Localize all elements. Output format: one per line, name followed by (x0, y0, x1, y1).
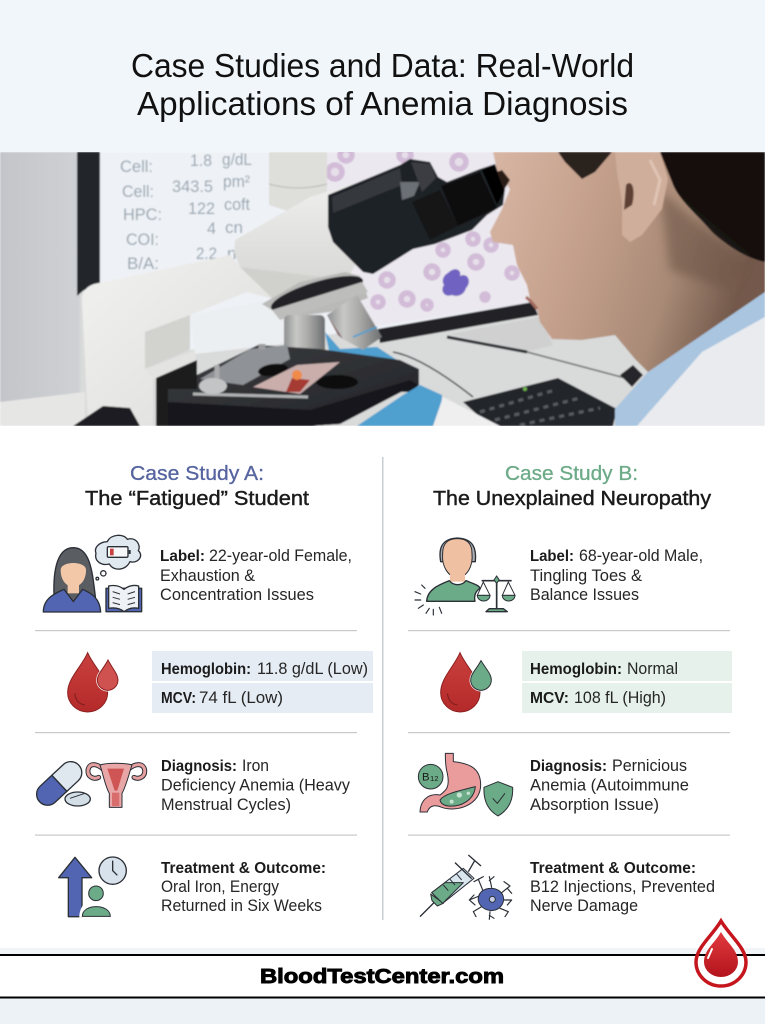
label text B: 68-year-old Male, (579, 547, 703, 565)
treatment text A: Treatment & Outcome: (161, 860, 326, 877)
diagnosis text B: Diagnosis: (530, 758, 607, 775)
monitor readings: Cell: (122, 182, 154, 201)
microscope pillar and arm (82, 152, 355, 426)
lab values B: Normal (627, 660, 678, 678)
heading: case study A (85, 462, 309, 510)
lab values B: MCV: (530, 690, 569, 707)
monitor readings: Cell: (120, 157, 153, 176)
treatment text B (530, 860, 715, 915)
diagnosis text B: Anemia (Autoimmune (530, 776, 689, 794)
heading: case study A: The “Fatigued” Student (85, 487, 309, 510)
icon: blood drops B (441, 653, 491, 712)
label text A (160, 547, 352, 604)
vertical divider (382, 457, 384, 920)
footer (0, 921, 765, 1024)
monitor readings: 2.2 (196, 244, 217, 263)
diagnosis text A (161, 757, 351, 814)
treatment text B: Treatment & Outcome: (530, 860, 696, 877)
treatment text B: Nerve Damage (530, 897, 638, 915)
icon: logo blood drop (696, 921, 746, 986)
icon: B12, stomach and shield: 12 (430, 774, 439, 783)
diagnosis text B (530, 757, 689, 814)
diagnosis text A: Iron (242, 757, 269, 775)
treatment text B: B12 Injections, Prevented (530, 878, 715, 896)
panel: case study B (408, 462, 732, 919)
icon: tired student with book (43, 535, 142, 612)
lab values B: 108 fL (High) (574, 689, 666, 707)
icon: B12, stomach and shield (418, 753, 513, 816)
monitor readings: cn (225, 218, 243, 237)
blue glove (357, 385, 442, 426)
panel: case study A (32, 462, 373, 917)
scientist's face and hair (490, 152, 765, 372)
lab values A: 11.8 g/dL (Low) (257, 660, 368, 678)
label text A: Exhaustion & (160, 567, 255, 585)
monitor readings (120, 150, 252, 273)
label text A: Concentration Issues (160, 586, 314, 604)
heading: case study A: Case Study A: (130, 462, 264, 485)
keyboard (463, 378, 617, 426)
title: Case Studies and Data: Real-World (131, 47, 634, 84)
label text A: Label: (160, 548, 205, 565)
icon: syringe and nerve cell (420, 855, 512, 919)
label text B: Tingling Toes & (530, 567, 642, 585)
lab values A: MCV: (161, 690, 196, 707)
title: Applications of Anemia Diagnosis (137, 85, 628, 122)
heading: case study B (433, 462, 712, 510)
diagnosis text A: Menstrual Cycles) (161, 796, 291, 814)
photo: scientist looking through a microscope (0, 149, 765, 426)
monitor readings: COI: (126, 230, 159, 249)
monitor readings: 1.8 (190, 151, 212, 170)
lab values A: 74 fL (Low) (199, 689, 283, 707)
monitor readings: 343.5 (172, 177, 213, 196)
gloved hand behind the stage (324, 332, 396, 360)
lab coat (433, 292, 765, 426)
label text B: Label: (530, 548, 574, 565)
treatment text A (161, 860, 326, 915)
diagnosis text A: Deficiency Anemia (Heavy (161, 776, 351, 794)
microscope stage (73, 344, 419, 426)
icon: blood drops A (68, 653, 118, 712)
diagnosis text B: Absorption Issue) (530, 796, 659, 814)
objective lenses and nosepiece (262, 272, 382, 351)
lab values A: Hemoglobin: (161, 661, 251, 678)
icon: B12, stomach and shield: B (422, 772, 430, 784)
title (131, 47, 634, 122)
heading: case study B: The Unexplained Neuropathy (433, 487, 712, 510)
label text B (530, 547, 703, 604)
monitor readings: HPC: (123, 205, 162, 224)
microscope eyepiece (328, 159, 505, 274)
monitor readings: pm² (223, 172, 250, 191)
icon: iron pills and uterus (32, 757, 145, 810)
lab values A (152, 651, 373, 713)
footer website: BloodTestCenter.com (260, 966, 504, 988)
label text A: 22-year-old Female, (209, 547, 352, 565)
heading: case study B: Case Study B: (505, 462, 638, 485)
treatment text A: Oral Iron, Energy (161, 878, 280, 896)
monitor readings: n (227, 244, 236, 263)
lab values B (522, 651, 732, 713)
monitor readings: coft (224, 195, 250, 214)
diagnosis text A: Diagnosis: (161, 758, 237, 775)
monitor readings: B/A: (127, 254, 159, 273)
lab values B: Hemoglobin: (530, 661, 622, 678)
blood cells on monitor (328, 149, 517, 309)
diagnosis text B: Pernicious (612, 757, 687, 775)
monitor readings: g/dL (222, 150, 252, 169)
monitor readings: 4 (207, 219, 216, 238)
icon: older man with balance scale (415, 538, 515, 615)
treatment text A: Returned in Six Weeks (161, 897, 322, 915)
label text B: Balance Issues (530, 586, 639, 604)
title band (0, 0, 765, 152)
monitor readings: 122 (188, 199, 215, 218)
icon: rising energy over time (59, 857, 126, 917)
monitor (77, 152, 643, 397)
